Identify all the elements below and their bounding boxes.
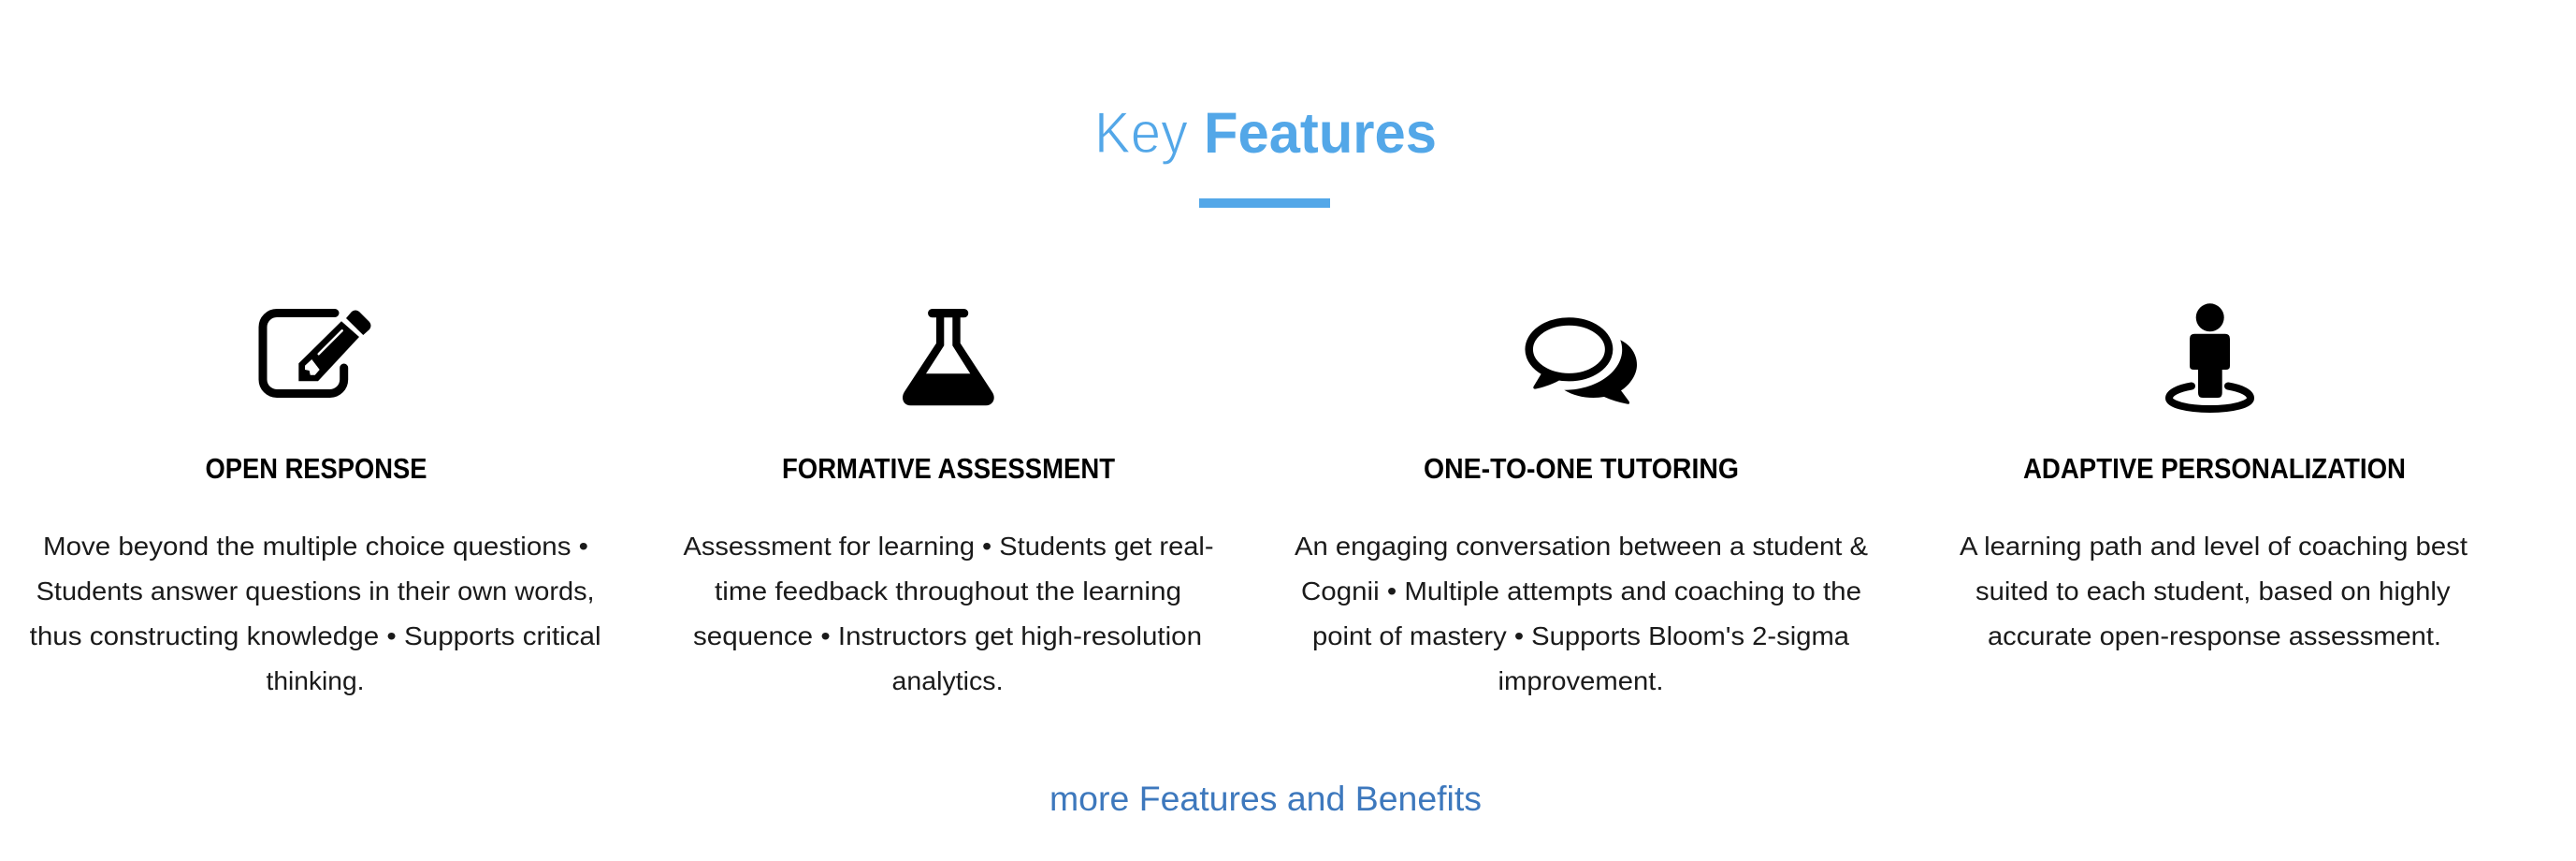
title (1094, 101, 1437, 166)
panel: one-to-one tutoring (1295, 322, 1868, 695)
icon: pencil on notepad (263, 311, 370, 393)
text block: open response description: Move beyond the multiple choice questions • (43, 532, 588, 561)
text block: one-to-one tutoring description: point of mastery • Supports Bloom's 2-sigma (1312, 621, 1849, 650)
text block: one-to-one tutoring description: Cognii • Multiple attempts and coaching to the (1301, 576, 1861, 606)
title: Key (1094, 101, 1188, 166)
text block: open response description: thus constructing knowledge • Supports critical (30, 621, 601, 650)
icon: person on location ring (2169, 303, 2250, 409)
icon: speech bubbles (1529, 322, 1637, 404)
panel: open response (30, 311, 601, 695)
text block: one-to-one tutoring description (1295, 532, 1868, 695)
text block: adaptive personalization description: A learning path and level of coaching best (1960, 532, 2467, 561)
heading: one-to-one tutoring: ONE-TO-ONE TUTORING (1424, 452, 1739, 485)
panel: adaptive personalization (1960, 303, 2467, 650)
link: more features and benefits: more Features and Benefits (1049, 780, 1482, 818)
text block: open response description: thinking. (266, 666, 365, 695)
panel: formative assessment (683, 309, 1214, 695)
text block: formative assessment description (683, 532, 1214, 695)
title: Features (1204, 101, 1437, 165)
heading: adaptive personalization: ADAPTIVE PERSONALIZATION (2023, 452, 2406, 485)
heading: open response: OPEN RESPONSE (206, 452, 427, 485)
text block: open response description (30, 532, 601, 695)
heading: formative assessment: FORMATIVE ASSESSMENT (782, 452, 1115, 485)
icon: flask (903, 309, 994, 405)
text block: adaptive personalization description: accurate open-response assessment. (1988, 621, 2441, 650)
text block: one-to-one tutoring description: improvement. (1498, 666, 1663, 695)
text block: adaptive personalization description: suited to each student, based on highly (1975, 576, 2451, 606)
text block: adaptive personalization description (1960, 532, 2467, 650)
text block: formative assessment description: time feedback throughout the learning (715, 576, 1181, 606)
text block: formative assessment description: sequence • Instructors get high-resolution (693, 621, 1202, 650)
text block: formative assessment description: analytics. (892, 666, 1003, 695)
title underline (1199, 198, 1330, 208)
text block: one-to-one tutoring description: An engaging conversation between a student & (1295, 532, 1868, 561)
text block: formative assessment description: Assessment for learning • Students get real- (683, 532, 1214, 561)
text block: open response description: Students answer questions in their own words, (36, 576, 595, 606)
